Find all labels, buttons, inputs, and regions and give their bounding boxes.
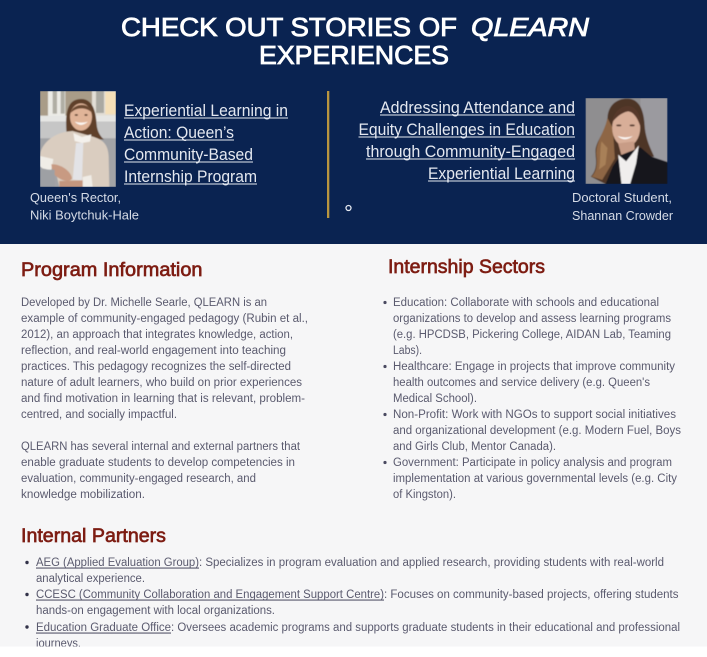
link: Experiential Learning in Action: Experiential Learning in <box>124 101 288 120</box>
list: partners: : Specializes in program evaluation and applied research, providing students with real-world <box>199 557 664 569</box>
link: Experiential Learning in Action: Internship Program <box>124 167 257 186</box>
link: Addressing Attendance: Experiential Learning <box>428 164 575 183</box>
panel: internal partners <box>21 526 680 650</box>
list: sectors: Government: Participate in policy analysis and program <box>393 457 672 469</box>
text block: program description: reflection, and real-world engagement into teaching <box>21 345 286 357</box>
list: partners: : Focuses on community-based projects, offering students <box>384 589 679 601</box>
list: sectors: of Kingston). <box>393 489 456 501</box>
list: partners: hands-on engagement with local organizations. <box>36 605 275 617</box>
title: CHECK OUT STORIES OF <box>121 12 457 42</box>
caption: Niki Boytchuk-Hale: Niki Boytchuk-Hale <box>30 208 139 222</box>
list: sectors: Labs). <box>393 345 422 357</box>
list: sectors: (e.g. HPCDSB, Pickering College, AIDAN Lab, Teaming <box>393 329 671 341</box>
caption: Shannan Crowder: Doctoral Student, <box>572 190 672 205</box>
caption: Niki Boytchuk-Hale <box>30 190 139 222</box>
heading: Internal Partners: Internal Partners <box>21 526 166 547</box>
photo: Niki Boytchuk-Hale <box>40 91 116 187</box>
list: partners: AEG (Applied Evaluation Group) <box>36 557 199 569</box>
link: Addressing Attendance: Addressing Attendance and <box>380 98 575 117</box>
list: sectors: Healthcare: Engage in projects that improve community <box>393 361 675 373</box>
text block: program description: practices. This pedagogy recognizes the self-directed <box>21 361 291 373</box>
footer: white strip cropping the page <box>0 646 707 657</box>
caption: Shannan Crowder: Shannan Crowder <box>572 208 674 223</box>
caption: Niki Boytchuk-Hale: Queen's Rector, <box>30 190 121 205</box>
link: Addressing Attendance <box>358 98 575 183</box>
text block: program description: example of community-engaged pedagogy (Rubin et al., <box>21 313 308 325</box>
text block: program description: enable graduate students to develop competencies in <box>21 457 295 469</box>
list: sectors: Medical School). <box>393 393 477 405</box>
list: sectors: Non-Profit: Work with NGOs to support social initiatives <box>393 409 676 421</box>
link: Addressing Attendance: Equity Challenges in Education <box>358 120 575 139</box>
title: QLEARN <box>471 12 589 42</box>
list: partners: CCESC (Community Collaboration and Engagement Support Centre) <box>36 589 384 601</box>
list: sectors: health outcomes and service delivery (e.g. Queen's <box>393 377 650 389</box>
title: EXPERIENCES <box>259 40 449 70</box>
text block: program description: evaluation, community-engaged research, and <box>21 473 256 485</box>
divider: gold bar <box>327 91 329 218</box>
list: sectors: organizations to develop and assess learning programs <box>393 313 671 325</box>
link: Experiential Learning in Action <box>124 101 288 186</box>
text block: program description: centred, and socially impactful. <box>21 409 177 421</box>
link: Addressing Attendance: through Community-Engaged <box>366 142 575 161</box>
photo: Shannan Crowder <box>586 98 667 184</box>
list: partners: Education Graduate Office <box>36 622 171 634</box>
caption: Shannan Crowder <box>572 190 674 223</box>
list: sectors: implementation at various governmental levels (e.g. City <box>393 473 677 485</box>
text block: program description: QLEARN has several internal and external partners that <box>21 441 301 453</box>
icon: small ring <box>346 206 351 210</box>
link: Experiential Learning in Action: Action: Queen’s <box>124 123 234 142</box>
list: sectors: Education: Collaborate with schools and educational <box>393 297 659 309</box>
text block: program description: knowledge mobilization. <box>21 489 145 501</box>
text block: program description <box>21 297 308 501</box>
list: partners: journeys. <box>35 638 81 650</box>
panel: header banner <box>0 0 707 244</box>
text block: program description: 2012), an approach that integrates knowledge, action, <box>21 329 293 341</box>
title <box>121 12 589 70</box>
list: partners <box>25 557 680 650</box>
link: Experiential Learning in Action: Community-Based <box>124 145 253 164</box>
list: partners: analytical experience. <box>36 573 145 585</box>
text block: program description: nature of adult learners, who build on prior experiences <box>21 377 302 389</box>
text block: program description: and find motivation in learning that is relevant, problem- <box>21 393 305 405</box>
list: partners: : Oversees academic programs and supports graduate students in their educational and professional <box>171 622 680 634</box>
heading: Internship Sectors: Internship Sectors <box>388 257 545 278</box>
text block: program description: Developed by Dr. Michelle Searle, QLEARN is an <box>21 297 267 309</box>
panel: internship sectors <box>383 257 681 501</box>
panel: program information <box>21 260 308 501</box>
list: sectors: and Girls Club, Mentor Canada). <box>393 441 556 453</box>
list: sectors <box>383 297 681 501</box>
list: sectors: and organizational development (e.g. Modern Fuel, Boys <box>393 425 681 437</box>
heading: Program Information: Program Information <box>21 260 202 281</box>
